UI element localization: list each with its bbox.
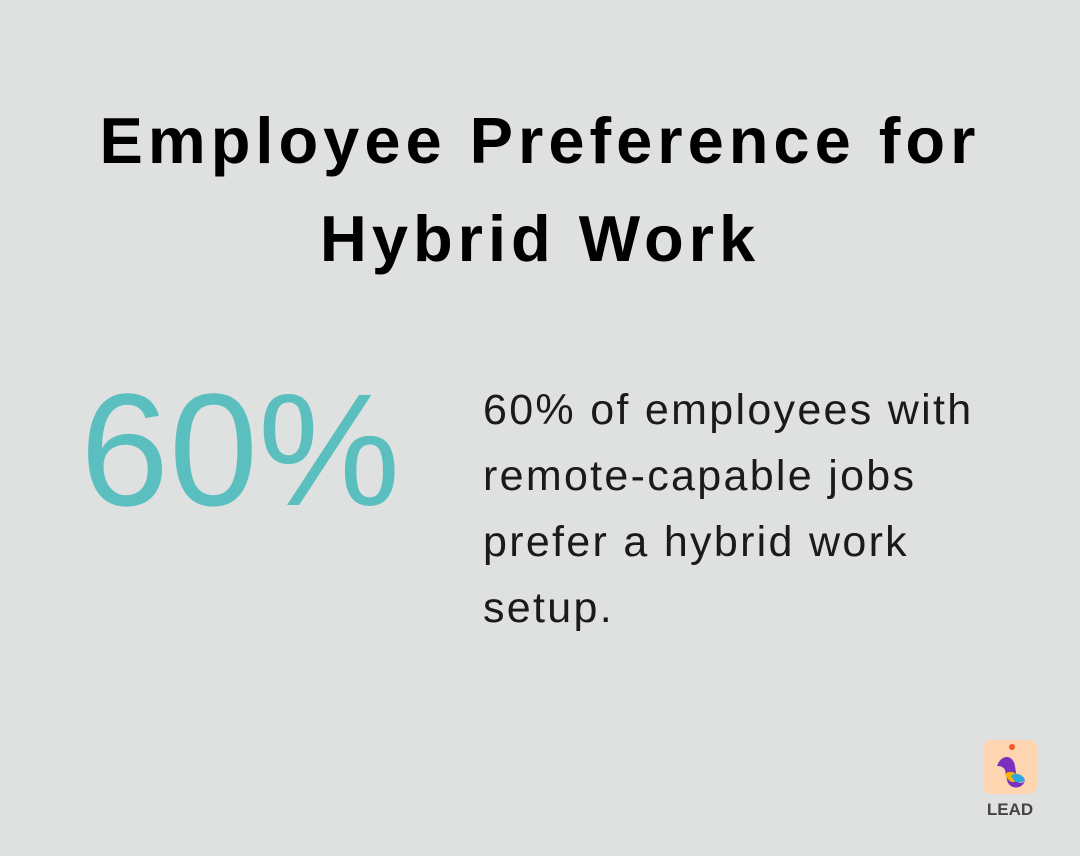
title <box>100 104 980 275</box>
description text: 60% of employees with <box>483 386 973 434</box>
logo: LEAD <box>983 740 1037 819</box>
big statistic: 60% <box>80 360 400 539</box>
description text <box>483 386 973 632</box>
logo: LEAD: LEAD <box>987 800 1033 819</box>
description text: remote-capable jobs <box>483 452 916 500</box>
title: Hybrid Work <box>320 202 760 275</box>
description text: setup. <box>483 584 614 632</box>
description text: prefer a hybrid work <box>483 518 909 566</box>
title: Employee Preference for <box>100 104 980 177</box>
